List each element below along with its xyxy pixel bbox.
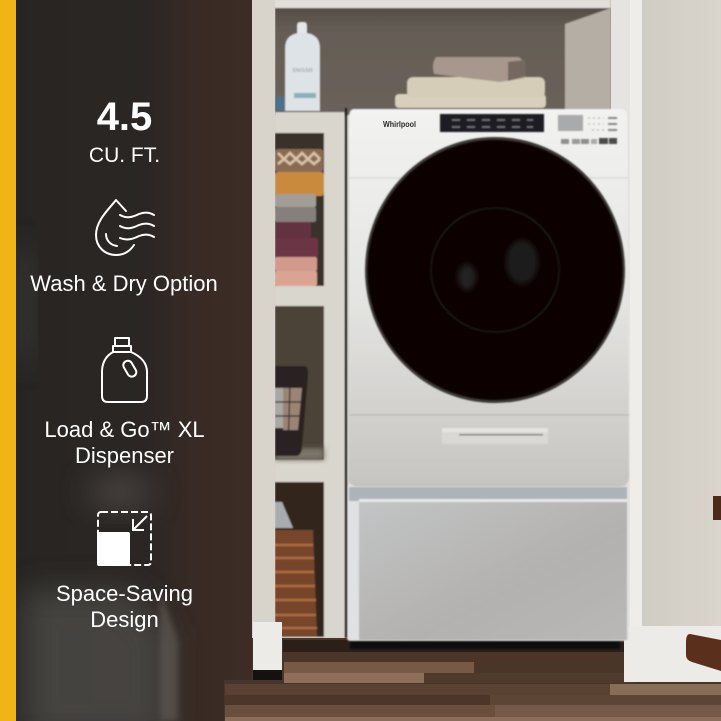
- label: Load & Go™ XL: [44, 417, 205, 442]
- yellow accent bar: [0, 0, 16, 721]
- dark side panel: [16, 0, 252, 721]
- feature: dispenser: [44, 338, 205, 468]
- icon: shrinking square: [97, 512, 151, 566]
- washer: [345, 108, 629, 638]
- feature: wash and dry: [30, 200, 218, 296]
- white door frame: [611, 0, 642, 640]
- feature: dispenser: Dispenser: [75, 443, 174, 468]
- shelf opening: textiles: [275, 133, 324, 286]
- right wall: [640, 0, 721, 721]
- label: Space-Saving: [56, 581, 193, 606]
- feature: capacity: [89, 95, 160, 167]
- left wall column: [250, 0, 275, 650]
- brand logo: Whirlpool: [383, 119, 416, 129]
- shelf opening: wire basket: [275, 306, 324, 460]
- control display panel: [440, 114, 617, 144]
- label: Wash & Dry Option: [30, 271, 218, 296]
- shelf opening: woven basket: [275, 482, 324, 637]
- detergent bottle: SWASH: [292, 68, 313, 74]
- feature: space saving: Design: [90, 607, 159, 632]
- far-right furniture: [686, 496, 721, 671]
- towels on washer: [395, 57, 546, 108]
- baseboards: [253, 622, 721, 682]
- capacity unit: CU. FT.: [89, 144, 160, 167]
- pedestal: [347, 484, 629, 641]
- drawer handle: [442, 428, 548, 444]
- recess above washer: [275, 0, 615, 115]
- floor: [220, 638, 721, 721]
- detergent bottle: [276, 22, 320, 111]
- capacity number: 4.5: [97, 95, 152, 139]
- feature: space saving: [56, 512, 193, 632]
- icon: water drop with waves: [96, 200, 154, 255]
- shelving unit: [275, 112, 345, 638]
- washer door: [365, 137, 625, 403]
- icon: detergent bottle: [102, 338, 147, 402]
